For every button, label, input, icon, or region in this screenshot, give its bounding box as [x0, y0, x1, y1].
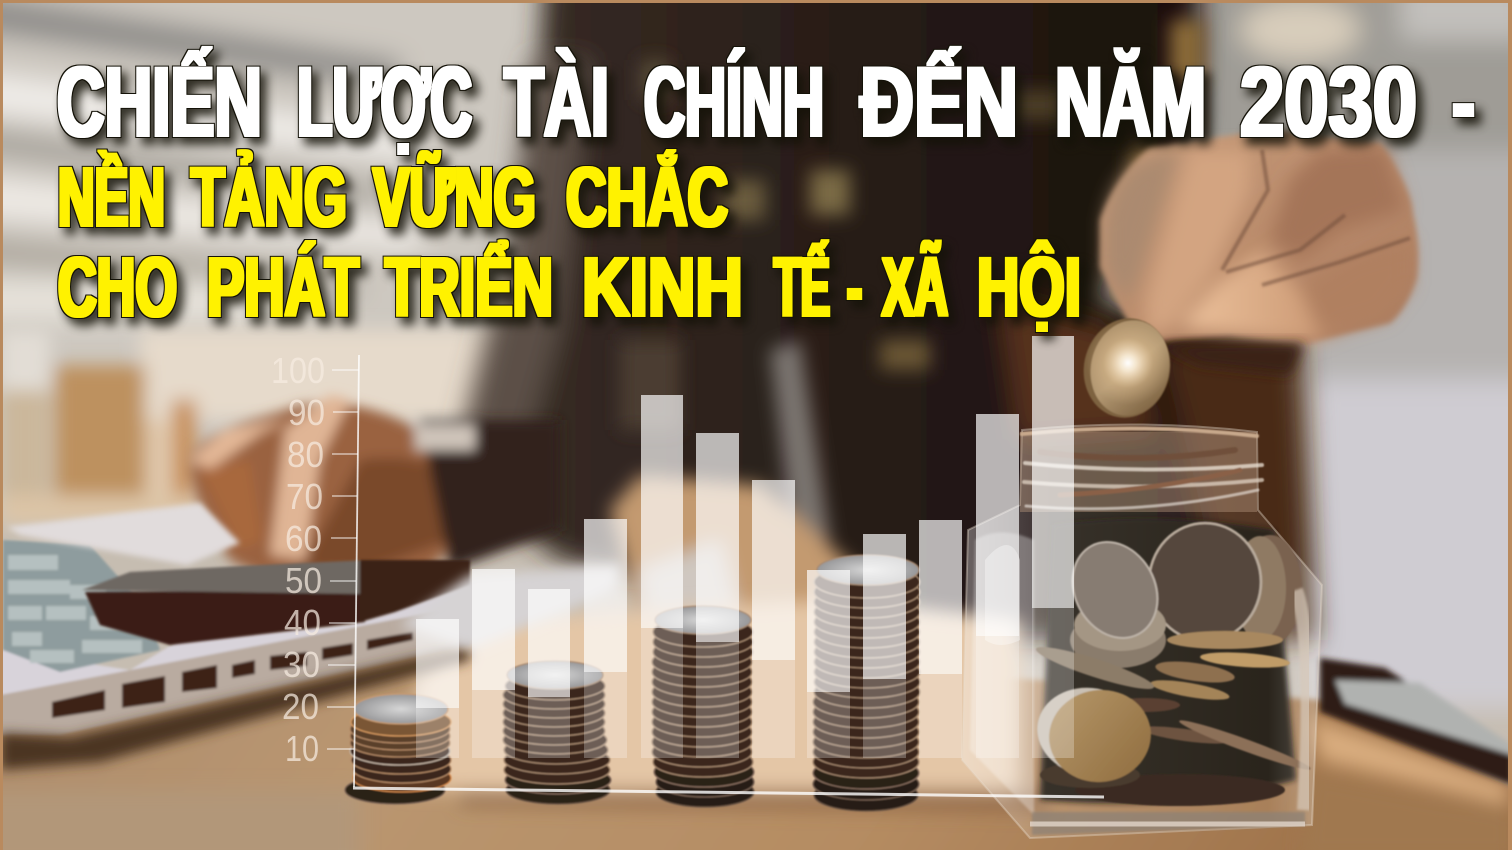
- hand dropping coin: [1100, 130, 1418, 343]
- title line 3 yellow: XÃ: [882, 240, 948, 334]
- coin stack 1: [345, 694, 451, 804]
- bar chart overlay: [271, 336, 1104, 797]
- axis labels: 100: [271, 350, 325, 391]
- laptop: [0, 540, 470, 735]
- title line 2 yellow: NỀN: [58, 150, 165, 244]
- right frame edge of photo: [1508, 0, 1512, 850]
- glass highlights: [1296, 590, 1308, 810]
- title line 3 yellow: [58, 240, 1081, 334]
- glass jar filled with coins: [962, 424, 1322, 838]
- finger creases: [1222, 150, 1410, 285]
- title line 1 white: -: [1452, 46, 1475, 157]
- window strip right of jar: [1320, 658, 1512, 785]
- title line 2 yellow: [58, 150, 728, 244]
- right side wall: [1190, 0, 1512, 710]
- title line 1 white: CHÍNH: [644, 46, 824, 157]
- blurred bokeh highlights and shirt details: [610, 20, 1204, 640]
- title: [57, 46, 1475, 334]
- jar interior coins mass: [1040, 519, 1296, 803]
- title line 3 yellow: -: [847, 240, 862, 334]
- jar body: [962, 424, 1322, 838]
- hand shading: [1105, 145, 1410, 343]
- person sweater, dark body: [450, 0, 1316, 640]
- axis labels: 50: [285, 560, 322, 601]
- coin held by fingers: [1075, 310, 1179, 426]
- title line 1 white: 2030: [1240, 46, 1417, 157]
- title line 3 yellow: TẾ: [774, 240, 830, 334]
- axis labels: 20: [282, 686, 319, 727]
- coin stack 3: [652, 606, 754, 807]
- title line 2 yellow: TẢNG: [191, 150, 347, 244]
- bars: [416, 336, 1074, 758]
- title line 1 white: CHIẾN: [57, 46, 262, 157]
- table surface: [0, 640, 1512, 850]
- axis labels: 60: [285, 518, 322, 559]
- title line 3 yellow: TRIỂN: [385, 240, 553, 334]
- axis labels: [271, 350, 325, 769]
- title line 3 yellow: PHÁT: [207, 240, 359, 334]
- title line 2 yellow: VỮNG: [373, 150, 536, 244]
- axis labels: 30: [283, 644, 320, 685]
- axis labels: 10: [285, 728, 319, 769]
- shadow below hand: [1160, 343, 1305, 375]
- axis labels: 80: [287, 434, 324, 475]
- jar neck: [1020, 428, 1262, 512]
- calculator: [82, 560, 470, 645]
- coin stack 2: [503, 661, 611, 804]
- coin glow: [1086, 321, 1170, 405]
- title line 3 yellow: KINH: [582, 240, 743, 334]
- axis labels: 40: [284, 602, 321, 643]
- title line 1 white: [57, 46, 1475, 157]
- shadow under laptop: [0, 645, 470, 770]
- coins in jar: [1030, 523, 1313, 806]
- title line 1 white: TÀI: [504, 46, 609, 157]
- title line 3 yellow: CHO: [58, 240, 177, 334]
- blurred wall with window blinds: [0, 0, 560, 520]
- axis labels: 90: [288, 392, 325, 433]
- title line 1 white: ĐẾN: [860, 46, 1018, 157]
- title line 3 yellow: HỘI: [977, 240, 1081, 334]
- title line 1 white: NĂM: [1055, 46, 1206, 157]
- title line 2 yellow: CHẮC: [566, 150, 728, 244]
- title line 1 white: LƯỢC: [297, 46, 472, 157]
- paper sheet: [7, 503, 240, 565]
- coin stack 4: [813, 555, 920, 811]
- axis labels: 70: [286, 476, 323, 517]
- axes: [327, 355, 1104, 797]
- writing arm and hand: [190, 395, 560, 590]
